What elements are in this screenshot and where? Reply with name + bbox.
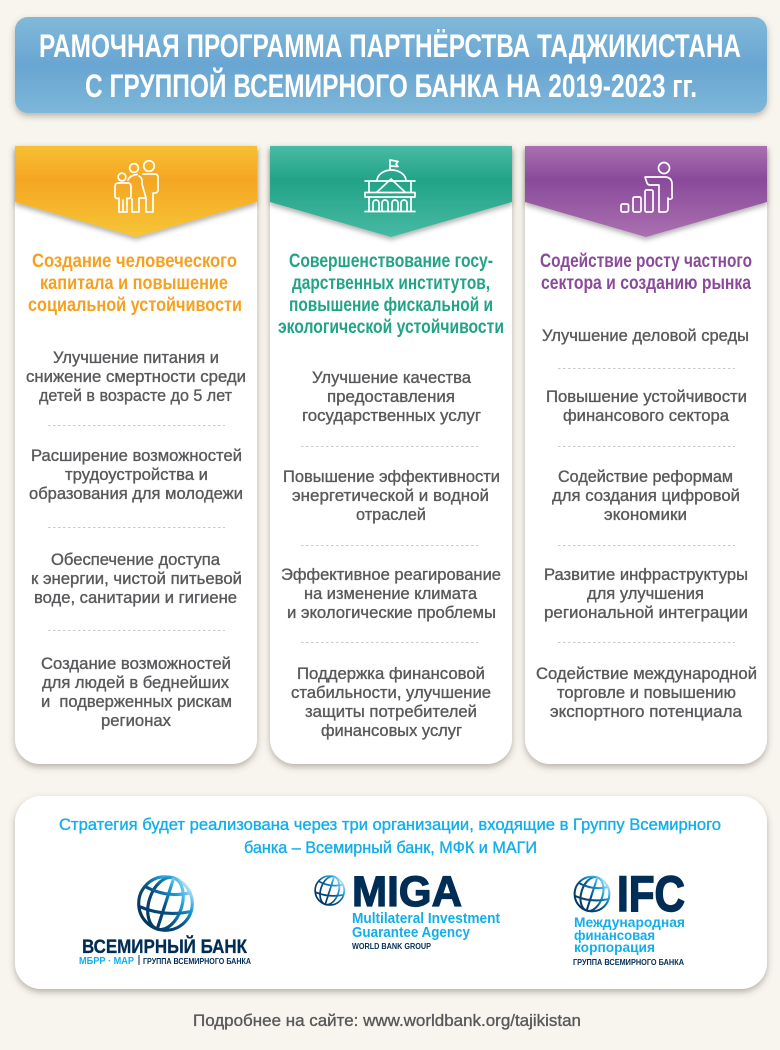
text: digital economy xyxy=(552,468,740,524)
text: business environment: Улучшение деловой среды xyxy=(542,327,749,345)
panel: implementing organizations xyxy=(15,796,767,989)
text: infrastructure: Развитие инфраструктуры xyxy=(544,566,748,584)
text: financial stability xyxy=(291,665,491,740)
title banner xyxy=(15,17,767,113)
text: nutrition: снижение смертности среди xyxy=(26,368,246,386)
heading: institutions: Совершенствование госу- xyxy=(289,251,493,272)
text: youth employment: Расширение возможностей xyxy=(31,447,242,465)
text: trade and export: Содействие международной xyxy=(536,665,757,683)
logo: World Bank: ВСЕМИРНЫЙ БАНК xyxy=(82,936,247,958)
text: financial sector xyxy=(546,388,747,425)
heading: human capital: капитала и повышение xyxy=(40,273,228,294)
text: nutrition xyxy=(26,349,246,405)
text: poorest regions: регионах xyxy=(101,712,172,730)
logo: World Bank: ГРУППА ВСЕМИРНОГО БАНКА xyxy=(143,957,251,966)
text: climate response xyxy=(281,566,501,622)
text: financial stability: защиты потребителей xyxy=(305,703,477,721)
logo: World Bank xyxy=(79,873,251,967)
strategy text: Стратегия будет реализована через три организации, входящие в Группу Всемирного xyxy=(59,816,721,834)
text: poorest regions: Создание возможностей xyxy=(41,655,231,673)
text: public services: государственных услуг xyxy=(302,407,481,425)
chevron header: green xyxy=(270,146,512,237)
text: financial stability: стабильности, улучшение xyxy=(291,684,491,702)
text: financial sector: Повышение устойчивости xyxy=(546,388,747,406)
text: youth employment: трудоустройства и xyxy=(65,466,208,484)
logo: IFC: корпорация xyxy=(574,940,655,955)
icon: family xyxy=(115,161,158,212)
chevron header: purple xyxy=(525,146,767,237)
text: energy and water access xyxy=(31,551,242,607)
text: digital economy: Содействие реформам xyxy=(558,468,733,486)
text: energy and water access: к энергии, чистой питьевой xyxy=(31,570,242,588)
text: financial stability: Поддержка финансовой xyxy=(297,665,485,683)
text: poorest regions: для людей в беднейших xyxy=(42,674,230,692)
text: digital economy: для создания цифровой xyxy=(552,487,740,505)
text: trade and export: торговле и повышению xyxy=(557,684,736,702)
logo: IFC: IFC xyxy=(617,866,685,922)
text: energy and water sectors xyxy=(283,468,500,524)
text: infrastructure xyxy=(544,566,748,622)
text: public services: Улучшение качества xyxy=(312,369,472,387)
panel: human capital xyxy=(15,146,257,764)
strategy text xyxy=(59,816,721,857)
text: energy and water access: воде, санитарии и гигиене xyxy=(34,589,237,607)
logo: IFC: Международная xyxy=(574,915,685,930)
logo: MIGA: WORLD BANK GROUP xyxy=(352,942,432,951)
logo: IFC: финансовая xyxy=(574,928,655,943)
icon: person with growing bars xyxy=(621,162,672,212)
text: youth employment: образования для молодежи xyxy=(29,485,243,503)
text: climate response: и экологические проблемы xyxy=(287,604,496,622)
heading: human capital xyxy=(28,251,242,316)
text: digital economy: экономики xyxy=(604,506,687,524)
heading: institutions: дарственных институтов, xyxy=(292,273,490,294)
strategy text: банка – Всемирный банк, МФК и МАГИ xyxy=(244,839,537,857)
logo: MIGA xyxy=(315,868,500,951)
title text xyxy=(39,28,741,104)
chevron header: yellow xyxy=(15,146,257,237)
text: youth employment xyxy=(29,447,243,503)
logo: IFC xyxy=(573,866,685,967)
text: climate response: на изменение климата xyxy=(304,585,478,603)
logo: MIGA: Multilateral Investment xyxy=(352,910,500,927)
text: trade and export: экспортного потенциала xyxy=(550,703,743,721)
text: infrastructure: для улучшения xyxy=(587,585,704,603)
heading: human capital: социальной устойчивости xyxy=(28,295,242,316)
text: financial stability: финансовых услуг xyxy=(321,722,462,740)
text: nutrition: детей в возрасте до 5 лет xyxy=(39,387,232,405)
panel: institutions xyxy=(270,146,512,764)
heading: private sector xyxy=(540,251,752,294)
logo: MIGA: Guarantee Agency xyxy=(352,924,471,941)
heading: institutions xyxy=(278,251,504,338)
text: financial sector: финансового сектора xyxy=(563,407,730,425)
footer link: Подробнее на сайте: www.worldbank.org/tajikistan xyxy=(193,1012,581,1030)
text: energy and water sectors: отраслей xyxy=(356,506,426,524)
heading: human capital: Создание человеческого xyxy=(32,251,237,272)
text: poorest regions xyxy=(41,655,232,730)
text: public services xyxy=(302,369,481,425)
text: climate response: Эффективное реагирование xyxy=(281,566,501,584)
text: energy and water access: Обеспечение доступа xyxy=(51,551,221,569)
text: energy and water sectors: Повышение эффективности xyxy=(283,468,500,486)
text: infrastructure: региональной интеграции xyxy=(544,604,748,622)
heading: institutions: повышение фискальной и xyxy=(289,295,493,316)
panel: private sector xyxy=(525,146,767,764)
logo: MIGA: MIGA xyxy=(352,868,462,916)
icon: government building xyxy=(365,160,415,212)
text: poorest regions: и подверженных рискам xyxy=(41,693,232,711)
heading: institutions: экологической устойчивости xyxy=(278,317,504,338)
logo: World Bank: МБРР · МАР xyxy=(79,956,134,967)
text: trade and export xyxy=(536,665,757,721)
text: nutrition: Улучшение питания и xyxy=(53,349,219,367)
logo: IFC: ГРУППА ВСЕМИРНОГО БАНКА xyxy=(573,958,684,967)
text: energy and water sectors: энергетической и водной xyxy=(292,487,489,505)
text: public services: предоставления xyxy=(327,388,455,406)
